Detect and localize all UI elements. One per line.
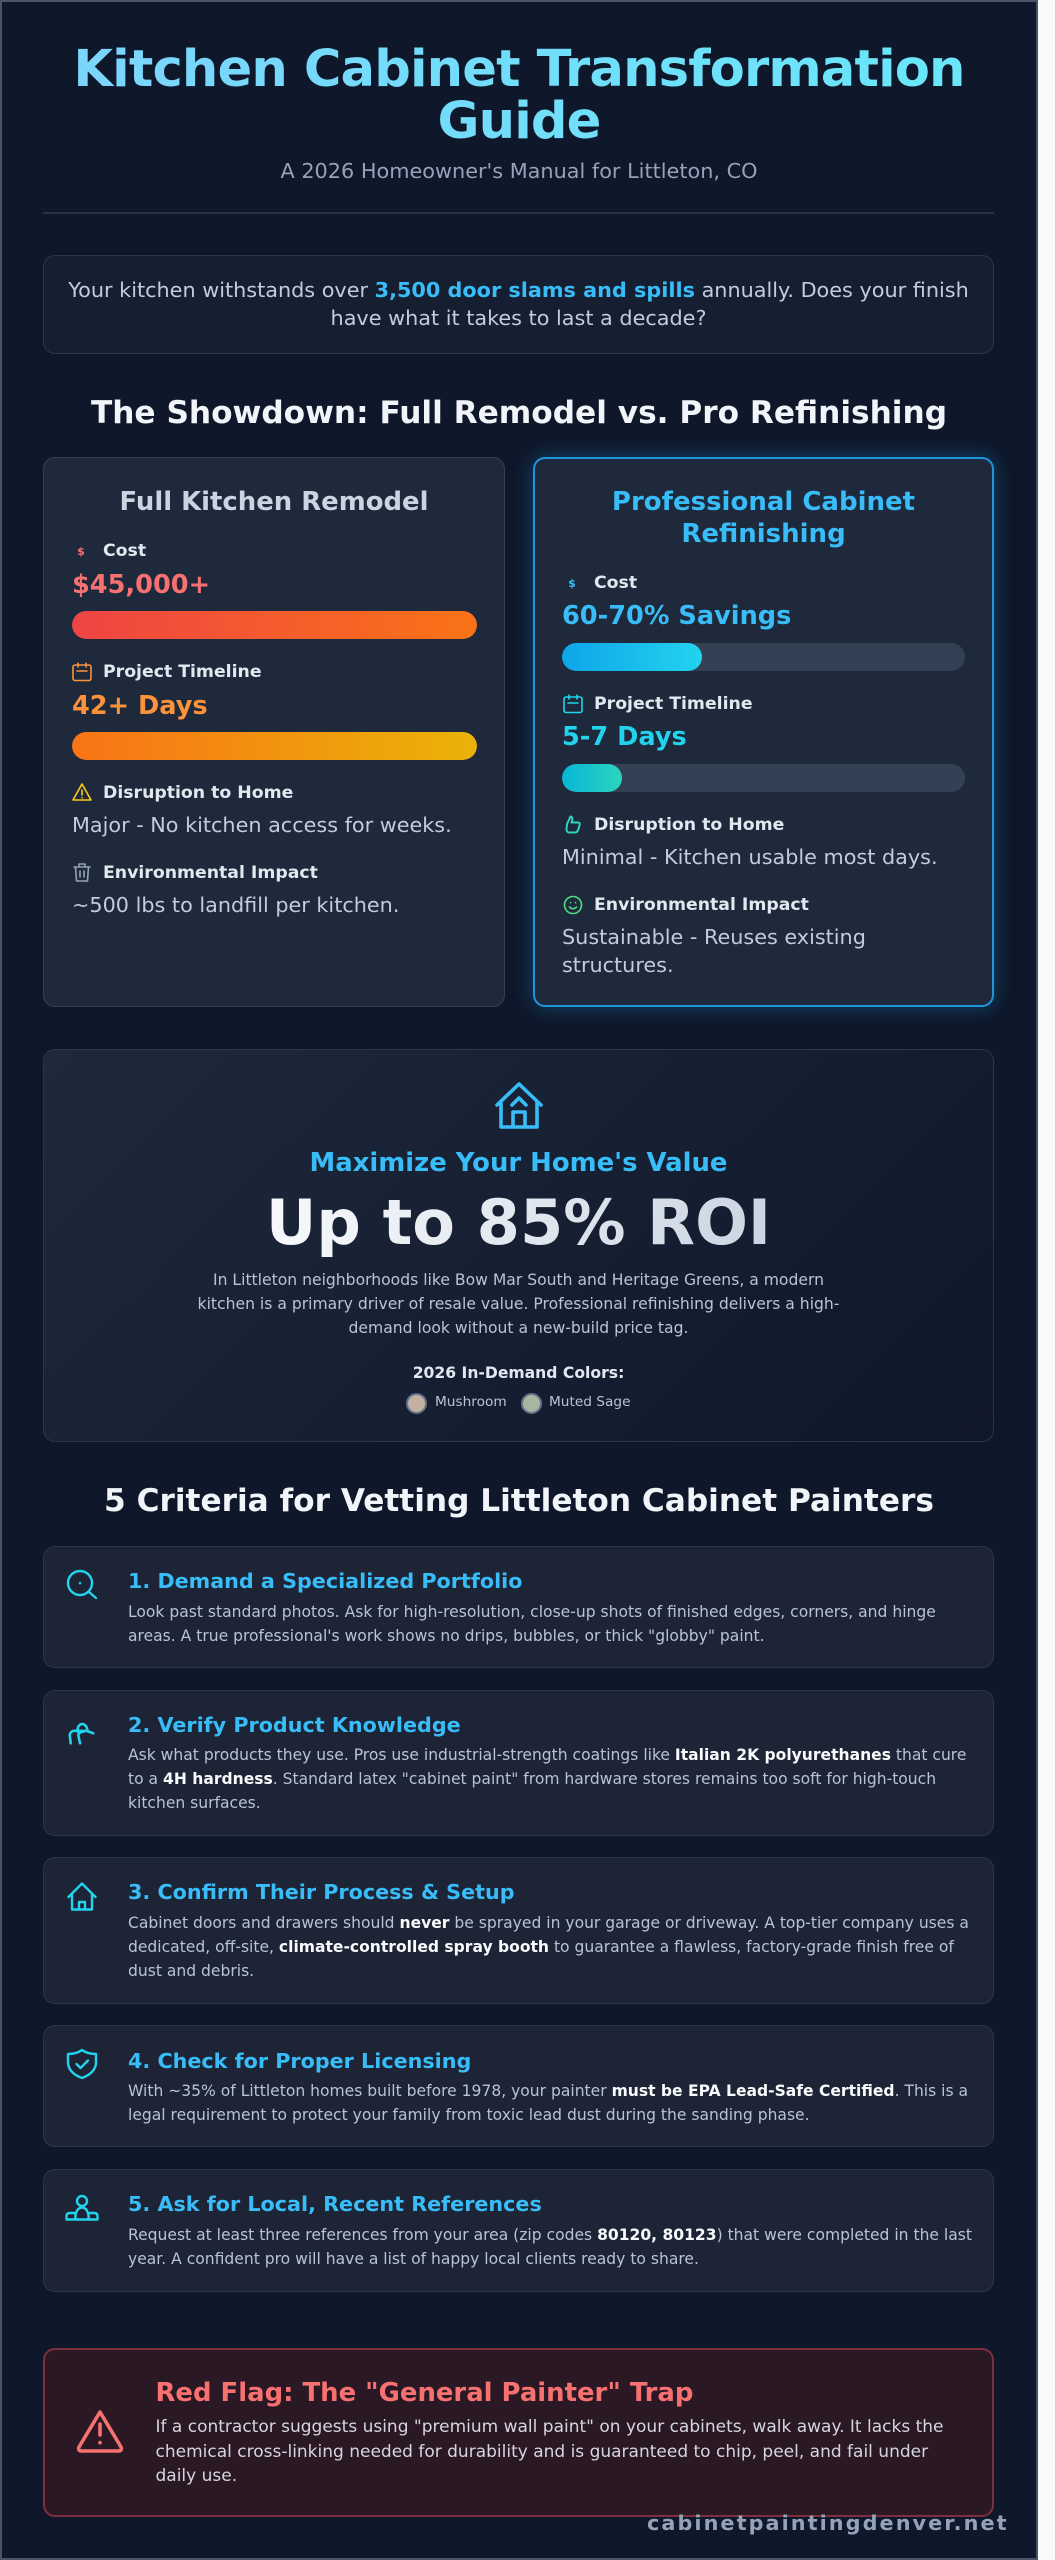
- cost label: Cost: [103, 541, 146, 561]
- red flag text: [156, 2417, 943, 2486]
- disruption text: Major - No kitchen access for weeks.: [72, 813, 452, 837]
- criterion 4 text: With ~35% of Littleton homes built before 1978, your painter must be EPA Lead-Safe Certified. This is a: [128, 2082, 968, 2100]
- cost label: Cost: [594, 573, 637, 593]
- icon: warning: [72, 783, 92, 801]
- icon: calendar: [563, 694, 583, 714]
- ROI description: [198, 1271, 839, 1337]
- icon: house: [495, 1082, 543, 1129]
- ROI stat: Up to 85% ROI: [266, 1186, 771, 1259]
- icon: thumbs up: [566, 816, 581, 834]
- criterion 2 text: to a 4H hardness. Standard latex "cabinet paint" from hardware stores remains too soft for high-touch: [128, 1770, 936, 1788]
- timeline value: 42+ Days: [72, 691, 208, 721]
- disruption text: Minimal - Kitchen usable most days.: [562, 845, 938, 869]
- heading: criteria: 5 Criteria for Vetting Littleton Cabinet Painters: [104, 1483, 934, 1519]
- environmental label: Environmental Impact: [594, 895, 809, 915]
- environmental text: [562, 925, 866, 977]
- red flag text: If a contractor suggests using "premium wall paint" on your cabinets, walk away. It lacks the: [156, 2417, 943, 2437]
- swatch: muted sage: [521, 1393, 630, 1414]
- panel heading: Professional Cabinet: [612, 487, 915, 517]
- criterion 5 text: [128, 2226, 972, 2268]
- icon: warning: [76, 2410, 124, 2453]
- ROI description: demand look without a new-build price tag.: [349, 1319, 688, 1337]
- icon: people: [65, 2194, 99, 2221]
- icon: shield check: [66, 2048, 98, 2080]
- panel: criterion 5: [43, 2169, 994, 2292]
- criterion 3 text: [128, 1914, 969, 1980]
- panel: criterion 3: [43, 1857, 994, 2004]
- ROI description: In Littleton neighborhoods like Bow Mar South and Heritage Greens, a modern: [213, 1271, 824, 1289]
- panel: ROI: [43, 1049, 994, 1442]
- panel: full kitchen remodel: [43, 457, 505, 1007]
- footer website: cabinetpaintingdenver.net: [647, 2511, 1009, 2535]
- criterion 1 text: areas. A true professional's work shows no drips, bubbles, or thick "globby" paint.: [128, 1627, 765, 1645]
- ROI description: kitchen is a primary driver of resale value. Professional refinishing delivers a high-: [198, 1295, 839, 1313]
- criterion 3 text: dedicated, off-site, climate-controlled spray booth to guarantee a flawless, factory-grade finish free of: [128, 1938, 954, 1956]
- disruption label: Disruption to Home: [103, 783, 293, 803]
- cost bar: [562, 643, 965, 671]
- title: [0, 43, 1038, 147]
- environmental text: structures.: [562, 953, 674, 977]
- icon: dollar: $: [568, 577, 575, 590]
- criterion 1 text: Look past standard photos. Ask for high-resolution, close-up shots of finished edges, corners, and hinge: [128, 1603, 936, 1621]
- icon: magnifier: [66, 1570, 98, 1600]
- mushroom label: Mushroom: [435, 1394, 507, 1410]
- environmental text: Sustainable - Reuses existing: [562, 925, 866, 949]
- icon: smile: [564, 896, 582, 914]
- criterion 3 text: dust and debris.: [128, 1962, 254, 1980]
- red flag title: Red Flag: The "General Painter" Trap: [156, 2378, 693, 2408]
- icon: trash: [73, 863, 91, 882]
- subtitle: A 2026 Homeowner's Manual for Littleton, CO: [280, 159, 758, 183]
- panel heading: [612, 487, 915, 549]
- criterion 4 title: 4. Check for Proper Licensing: [128, 2049, 471, 2073]
- timeline bar: [562, 764, 965, 792]
- panel: criterion 1: [43, 1546, 994, 1668]
- disruption label: Disruption to Home: [594, 815, 784, 835]
- sage label: Muted Sage: [549, 1394, 630, 1410]
- criterion 2 text: [128, 1746, 966, 1812]
- criterion 2 text: kitchen surfaces.: [128, 1794, 261, 1812]
- heading: showdown: The Showdown: Full Remodel vs. Pro Refinishing: [91, 395, 947, 431]
- swatch: mushroom: [406, 1393, 507, 1414]
- mushroom circle: [406, 1393, 427, 1414]
- criterion 1 title: 1. Demand a Specialized Portfolio: [128, 1569, 522, 1593]
- panel heading: Full Kitchen Remodel: [120, 487, 428, 517]
- panel: criterion 4: [43, 2025, 994, 2147]
- title: Kitchen Cabinet Transformation: [73, 39, 965, 99]
- criterion 3 text: Cabinet doors and drawers should never be sprayed in your garage or driveway. A top-tier company uses a: [128, 1914, 969, 1932]
- sage circle: [521, 1393, 542, 1414]
- timeline label: Project Timeline: [103, 662, 262, 682]
- criterion 2 title: 2. Verify Product Knowledge: [128, 1713, 461, 1737]
- ROI heading: Maximize Your Home's Value: [310, 1148, 727, 1178]
- criterion 5 text: Request at least three references from your area (zip codes 80120, 80123) that were completed in the last: [128, 2226, 972, 2244]
- intro callout: Your kitchen withstands over 3,500 door slams and spills annually. Does your finish: [68, 278, 969, 302]
- criterion 1 text: [128, 1603, 936, 1645]
- timeline value: 5-7 Days: [562, 722, 687, 752]
- red flag text: chemical cross-linking needed for durability and is guaranteed to chip, peel, and fail under: [156, 2442, 928, 2462]
- environmental text: ~500 lbs to landfill per kitchen.: [72, 893, 399, 917]
- red flag text: daily use.: [156, 2466, 237, 2486]
- panel: professional cabinet refinishing: [533, 457, 994, 1007]
- panel heading: Refinishing: [681, 519, 846, 549]
- icon: home: [67, 1882, 97, 1911]
- colors heading: 2026 In-Demand Colors:: [413, 1364, 624, 1382]
- icon: dollar: $: [77, 545, 85, 558]
- cost value: $45,000+: [72, 570, 210, 600]
- title: Guide: [437, 91, 600, 151]
- cost bar: [72, 611, 477, 639]
- intro callout: [43, 255, 994, 354]
- environmental label: Environmental Impact: [103, 863, 318, 883]
- criterion 4 text: legal requirement to protect your family from toxic lead dust during the sanding phase.: [128, 2106, 810, 2124]
- timeline label: Project Timeline: [594, 694, 753, 714]
- panel: criterion 2: [43, 1690, 994, 1836]
- criterion 4 text: [128, 2082, 968, 2124]
- timeline bar: [72, 732, 477, 760]
- cost value: 60-70% Savings: [562, 601, 791, 631]
- panel: red flag: [43, 2348, 994, 2517]
- criterion 2 text: Ask what products they use. Pros use industrial-strength coatings like Italian 2K polyurethanes that cure: [128, 1746, 966, 1764]
- criterion 3 title: 3. Confirm Their Process & Setup: [128, 1880, 515, 1904]
- criterion 5 title: 5. Ask for Local, Recent References: [128, 2192, 542, 2216]
- icon: calendar: [72, 662, 92, 682]
- intro callout: have what it takes to last a decade?: [331, 306, 706, 330]
- criterion 5 text: year. A confident pro will have a list of happy local clients ready to share.: [128, 2250, 699, 2268]
- icon: spray: [68, 1722, 95, 1745]
